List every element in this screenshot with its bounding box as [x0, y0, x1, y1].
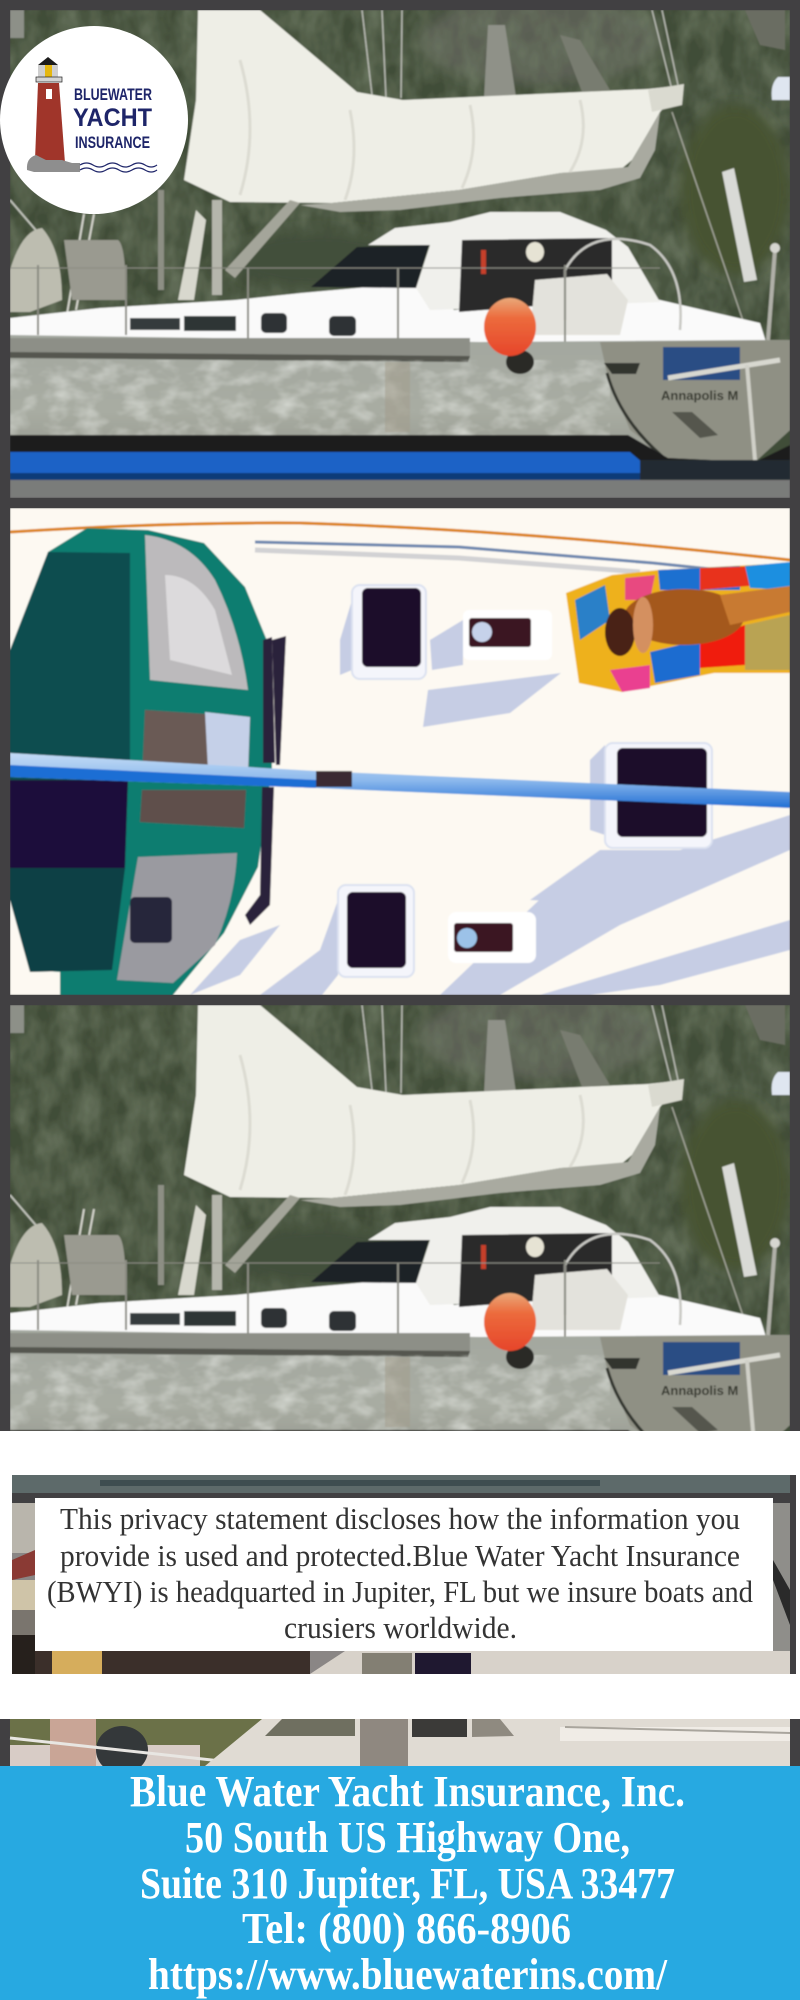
boom: [10, 753, 790, 808]
dinghy on deck: [10, 228, 126, 312]
sail cover: [184, 10, 684, 212]
text box: [35, 1498, 773, 1651]
privacy statement text: provide is used and protected.Blue Water Yacht Insurance: [60, 1538, 740, 1573]
whisker pole on stern: [722, 168, 780, 340]
logo text: BLUEWATER: [74, 85, 152, 104]
house and dock at left edge: [12, 1503, 35, 1674]
panel: motor yacht photo strip: [10, 1719, 790, 1774]
icon: lighthouse: [27, 57, 157, 172]
panel: sailboat side photo: [10, 0, 790, 498]
fender: [484, 298, 536, 374]
contact text: https://www.bluewaterins.com/: [148, 1950, 668, 1999]
hull: [10, 335, 790, 462]
toe rail and side rail: [10, 523, 790, 572]
radar dome: [772, 77, 790, 100]
windshield struts: [245, 636, 286, 925]
lower boat strip: [35, 1503, 790, 1674]
footer: contact band: [0, 1766, 800, 2000]
contact text: 50 South US Highway One,: [185, 1813, 630, 1862]
deck shadows: [190, 600, 790, 995]
lifelines and stanchions: [10, 265, 660, 345]
hull: Annapolis M: [661, 388, 738, 403]
privacy statement text: crusiers worldwide.: [284, 1610, 517, 1645]
panel: sailboat side photo repeated: [10, 1005, 790, 1431]
boot stripe and waterline: [10, 435, 790, 482]
standing rigging: [10, 10, 770, 400]
deck vents: [448, 610, 552, 963]
contact text: Blue Water Yacht Insurance, Inc.: [130, 1767, 685, 1816]
sunbather on towel: [566, 562, 790, 692]
privacy statement text: [47, 1501, 753, 1645]
dark canvas: [10, 552, 130, 972]
logo text: [73, 85, 152, 152]
logo badge: [0, 26, 188, 214]
deck hatches: [338, 585, 712, 977]
mast and boom gallows: [158, 190, 300, 300]
contact text: Tel: (800) 866-8906: [242, 1904, 571, 1953]
logo text: INSURANCE: [75, 133, 150, 152]
panel: deck from above photo: [10, 508, 790, 995]
forest and cliff backdrop: [10, 0, 790, 498]
contact text: [130, 1767, 685, 1999]
white band around lower photos: [0, 1431, 800, 1719]
deck: [10, 508, 790, 995]
water: [10, 480, 790, 498]
panel: privacy statement over photo: [12, 1475, 796, 1674]
window panels: [117, 535, 250, 983]
privacy statement text: (BWYI) is headquarted in Jupiter, FL but we insure boats and: [47, 1574, 753, 1609]
privacy statement text: This privacy statement discloses how the information you: [60, 1501, 740, 1536]
contact text: Suite 310 Jupiter, FL, USA 33477: [140, 1859, 675, 1908]
cabin and superstructure: [10, 212, 766, 342]
logo text: YACHT: [73, 104, 152, 132]
dodger frame: [48, 527, 273, 995]
